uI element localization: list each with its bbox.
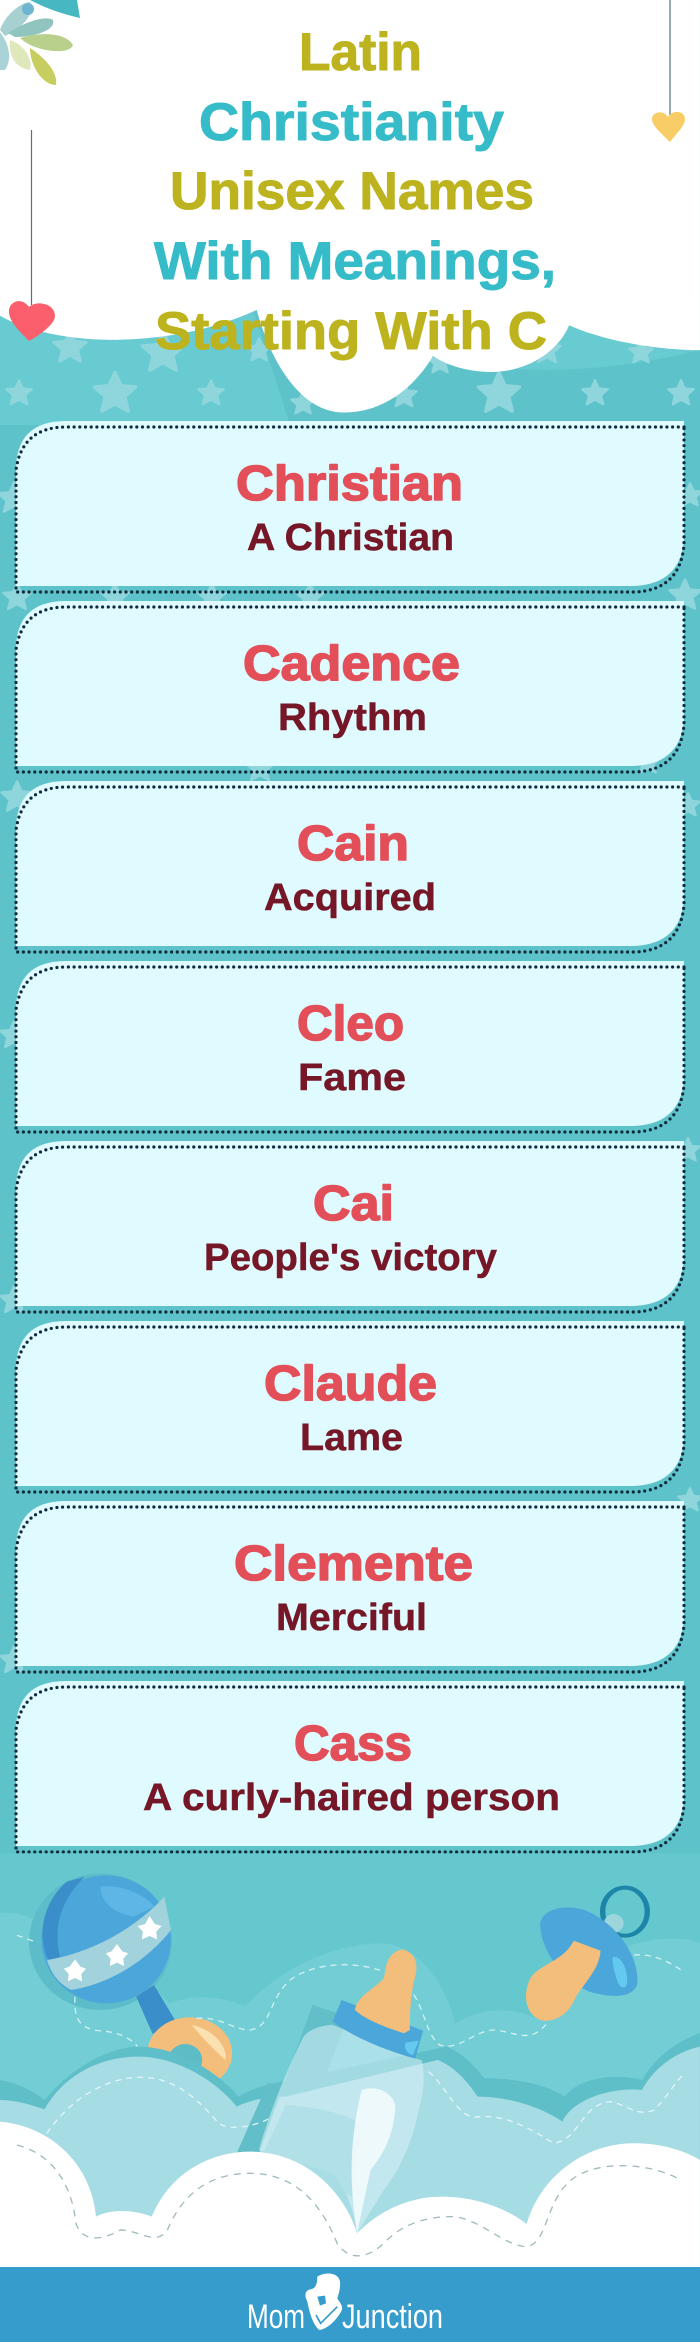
panel: Christian: Christian [236, 457, 463, 511]
panel: Cai: People's victory [204, 1237, 497, 1279]
white front cloud [0, 2122, 700, 2268]
panel: Claude: Claude [264, 1357, 437, 1411]
panel: Clemente [16, 1501, 684, 1672]
title: With Meanings, [154, 232, 556, 291]
bottom illustration [0, 1853, 700, 2268]
star pattern [0, 331, 700, 1672]
dark cloud layer [0, 2033, 700, 2267]
panel: Clemente: Merciful [276, 1597, 427, 1639]
back clouds [0, 1853, 700, 2267]
panel: Cadence: Cadence [243, 637, 460, 691]
panel: Cleo: Cleo [297, 997, 404, 1051]
dashed lines back [17, 1935, 681, 2047]
title [154, 23, 556, 361]
panel: Cai: Cai [313, 1177, 394, 1231]
panel: Cain: Cain [297, 817, 409, 871]
panel: Cain: Acquired [264, 877, 436, 919]
title: Unisex Names [170, 162, 534, 221]
title: Christianity [199, 93, 505, 152]
panel: Cain [16, 781, 684, 952]
panel: Cleo [16, 961, 684, 1132]
panel: Claude [16, 1321, 684, 1492]
logo wordmark: Mom [247, 2298, 305, 2336]
title: Starting With C [155, 302, 547, 361]
dashed lines on white cloud [17, 2145, 681, 2256]
panel: Christian [16, 421, 684, 592]
icon: pacifier [526, 1888, 647, 2021]
panel: Cai [16, 1141, 684, 1312]
panel: Cass: Cass [294, 1717, 412, 1771]
panel: Cadence [16, 601, 684, 772]
title: Latin [299, 23, 422, 82]
icon: bottle [237, 1949, 424, 2233]
panel: Cass [16, 1681, 684, 1852]
panel: Christian: A Christian [247, 517, 454, 559]
dashed lines front [47, 2072, 683, 2143]
logo wordmark [247, 2298, 443, 2336]
logo wordmark: Junction [342, 2298, 443, 2336]
panel: Clemente: Clemente [234, 1537, 473, 1591]
icon: red heart on string [9, 130, 55, 341]
panel: Cass: A curly-haired person [143, 1777, 560, 1819]
front blue cloud layer [0, 2047, 700, 2267]
footer [0, 2267, 700, 2342]
icon: logo silhouette [305, 2273, 342, 2330]
icon: yellow heart on string [652, 0, 685, 142]
icon: rattle [29, 1873, 232, 2089]
panel: Cadence: Rhythm [278, 697, 427, 739]
panel: Claude: Lame [300, 1417, 403, 1459]
icon: leaves [0, 0, 80, 85]
white header cloud [0, 0, 700, 413]
panel: Cleo: Fame [298, 1057, 406, 1099]
